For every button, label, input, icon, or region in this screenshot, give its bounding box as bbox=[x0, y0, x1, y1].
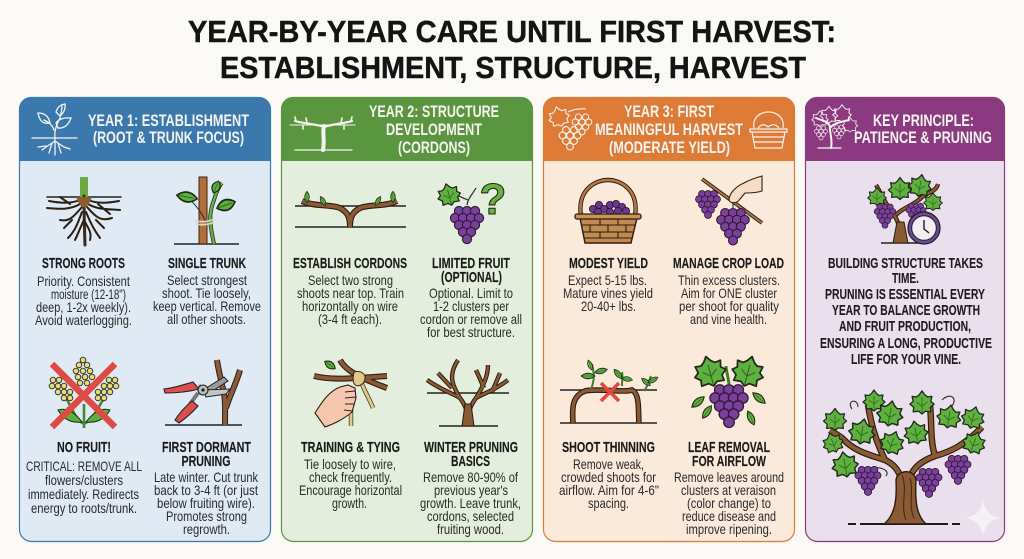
item: modest yield: Expect 5-15 lbs. bbox=[568, 273, 647, 288]
heading: year 2: YEAR 2: STRUCTURE bbox=[369, 102, 499, 121]
heading: year 1: YEAR 1: ESTABLISHMENT bbox=[88, 111, 249, 130]
item: modest yield: Mature vines yield bbox=[563, 286, 653, 301]
item: shoot thinning: Remove weak, bbox=[573, 457, 644, 472]
item: single trunk bbox=[153, 177, 261, 327]
item: establish cordons: horizontally on wire bbox=[302, 299, 398, 314]
icon: pruned vine bbox=[427, 360, 509, 426]
title bbox=[188, 14, 836, 85]
item: first dormant pruning: PRUNING bbox=[182, 453, 230, 470]
item: limited fruit: 1-2 clusters per bbox=[433, 299, 509, 314]
item: no fruit: immediately. Redirects bbox=[28, 487, 139, 502]
item: manage crop load bbox=[673, 176, 784, 327]
item: limited fruit: LIMITED FRUIT bbox=[432, 255, 510, 272]
icon: mature vine tree bbox=[820, 390, 989, 524]
icon: hand tying cordon bbox=[314, 359, 387, 427]
item: manage crop load: Aim for ONE cluster bbox=[681, 286, 777, 301]
item: establish cordons: Select two strong bbox=[308, 273, 393, 288]
icon: basket of grapes bbox=[575, 180, 641, 243]
item: winter pruning basics: BASICS bbox=[451, 453, 490, 470]
icon: sparkle watermark bbox=[965, 501, 1001, 535]
item: leaf removal: reduce disease and bbox=[682, 509, 776, 524]
item: no fruit bbox=[26, 357, 142, 516]
item: single trunk: SINGLE TRUNK bbox=[168, 255, 246, 272]
item: first dormant pruning: Late winter. Cut trunk bbox=[154, 470, 258, 485]
item: manage crop load: and vine health. bbox=[690, 312, 767, 327]
icon: white basket bbox=[750, 112, 787, 148]
item: leaf removal: LEAF REMOVAL bbox=[688, 439, 770, 456]
icon: white vine bbox=[290, 117, 355, 150]
item: modest yield: MODEST YIELD bbox=[569, 255, 648, 272]
item: establish cordons bbox=[293, 191, 407, 327]
item: strong roots: STRONG ROOTS bbox=[42, 255, 125, 272]
heading: year 2: DEVELOPMENT bbox=[386, 120, 482, 139]
panel: year 3 first harvest bbox=[543, 97, 795, 542]
item: limited fruit: for best structure. bbox=[427, 325, 515, 340]
item: strong roots bbox=[35, 177, 132, 328]
item: leaf removal: improve ripening. bbox=[686, 522, 772, 537]
panel: year 1 establishment bbox=[19, 97, 271, 542]
item: training and tying: Tie loosely to wire, bbox=[304, 457, 396, 472]
item: first dormant pruning bbox=[154, 360, 258, 537]
item: first dormant pruning: Promotes strong bbox=[166, 509, 247, 524]
item: leaf removal bbox=[674, 352, 784, 537]
heading: year 3: YEAR 3: FIRST bbox=[624, 102, 714, 121]
heading: year 3 bbox=[595, 102, 743, 157]
item: first dormant pruning: below fruiting wire). bbox=[157, 496, 255, 511]
item: winter pruning basics: previous year's bbox=[434, 483, 508, 498]
heading: year 1 bbox=[88, 111, 249, 147]
item: no fruit: flowers/clusters bbox=[45, 473, 123, 488]
item: modest yield: 20-40+ lbs. bbox=[581, 299, 636, 314]
item: limited fruit: cordon or remove all bbox=[420, 312, 522, 327]
heading: year 2 bbox=[369, 102, 499, 157]
key principle text: AND FRUIT PRODUCTION, bbox=[839, 318, 971, 335]
item: shoot thinning bbox=[559, 359, 659, 511]
item: winter pruning basics: cordons, selected bbox=[427, 509, 514, 524]
heading: year 3: MEANINGFUL HARVEST bbox=[595, 120, 743, 139]
item: first dormant pruning: FIRST DORMANT bbox=[162, 439, 251, 456]
item: training and tying: check frequently. bbox=[309, 470, 392, 485]
item: shoot thinning: crowded shoots for bbox=[561, 470, 656, 485]
item: establish cordons: ESTABLISH CORDONS bbox=[293, 255, 407, 272]
item: winter pruning basics bbox=[420, 360, 521, 537]
icon: grape with question mark: ? bbox=[480, 175, 506, 224]
icon: vine with clock bbox=[868, 173, 942, 244]
item: manage crop load: per shoot for quality bbox=[679, 299, 779, 314]
heading: year 3: (MODERATE YIELD) bbox=[609, 138, 730, 157]
item: leaf removal: clusters at veraison bbox=[681, 483, 776, 498]
icon: arched vine with red cross bbox=[560, 359, 659, 423]
icon: staked shoot bbox=[174, 177, 239, 244]
heading: year 2: (CORDONS) bbox=[398, 138, 470, 157]
item: limited fruit bbox=[420, 175, 522, 340]
icon: grape with leaves bbox=[690, 352, 768, 427]
panel: year 2 structure development bbox=[281, 97, 533, 542]
item: leaf removal: (color change) to bbox=[687, 496, 771, 511]
item: limited fruit: (OPTIONAL) bbox=[441, 269, 502, 286]
item: strong roots: moisture (12-18") bbox=[51, 287, 126, 302]
item: establish cordons: shoots near top. Train bbox=[297, 286, 404, 301]
key principle text: LIFE FOR YOUR VINE. bbox=[851, 351, 961, 368]
icon: roots bbox=[47, 177, 121, 245]
icon: seedling bbox=[32, 104, 77, 155]
item: leaf removal: FOR AIRFLOW bbox=[692, 453, 767, 470]
icon: white grapes bbox=[546, 104, 592, 150]
heading: key principle bbox=[854, 111, 992, 147]
item: no fruit: NO FRUIT! bbox=[57, 439, 111, 456]
item: strong roots: Priority. Consistent bbox=[37, 274, 130, 289]
item: training and tying: Encourage horizontal bbox=[299, 483, 402, 498]
item: no fruit: CRITICAL: REMOVE ALL bbox=[26, 459, 142, 474]
item: training and tying: TRAINING & TYING bbox=[301, 439, 400, 456]
key principle text bbox=[820, 255, 992, 368]
item: manage crop load: MANAGE CROP LOAD bbox=[673, 255, 784, 272]
panel: key principle bbox=[805, 97, 1005, 542]
item: modest yield bbox=[563, 180, 653, 314]
icon: white vine tree bbox=[812, 105, 858, 148]
icon: grape with question mark bbox=[435, 175, 506, 244]
key principle text: TIME. bbox=[892, 270, 919, 287]
heading: key principle: KEY PRINCIPLE: bbox=[873, 111, 974, 130]
title: YEAR-BY-YEAR CARE UNTIL FIRST HARVEST: bbox=[188, 14, 836, 49]
item: manage crop load: Thin excess clusters. bbox=[678, 273, 780, 288]
item: limited fruit: Optional. Limit to bbox=[429, 286, 513, 301]
item: single trunk: all other shoots. bbox=[167, 312, 246, 327]
item: winter pruning basics: growth. Leave trunk, bbox=[420, 496, 521, 511]
heading: year 1: (ROOT & TRUNK FOCUS) bbox=[93, 128, 244, 147]
item: strong roots: Avoid waterlogging. bbox=[35, 313, 132, 328]
icon: cordons on wire bbox=[295, 191, 406, 227]
item: shoot thinning: airflow. Aim for 4-6" bbox=[559, 483, 659, 498]
item: single trunk: shoot. Tie loosely, bbox=[162, 286, 251, 301]
item: winter pruning basics: fruiting wood. bbox=[437, 522, 504, 537]
item: first dormant pruning: regrowth. bbox=[183, 522, 230, 537]
item: no fruit: energy to roots/trunk. bbox=[31, 501, 137, 516]
item: winter pruning basics: Remove 80-90% of bbox=[423, 470, 518, 485]
item: training and tying: growth. bbox=[332, 496, 367, 511]
item: leaf removal: Remove leaves around bbox=[674, 470, 784, 485]
icon: crossed flower clusters bbox=[49, 357, 119, 428]
title: ESTABLISHMENT, STRUCTURE, HARVEST bbox=[220, 50, 806, 85]
item: first dormant pruning: back to 3-4 ft (or just bbox=[154, 483, 258, 498]
item: establish cordons: (3-4 ft each). bbox=[318, 312, 382, 327]
icon: pruners and stem bbox=[164, 360, 242, 425]
item: training and tying bbox=[299, 359, 402, 511]
item: single trunk: keep vertical. Remove bbox=[153, 299, 261, 314]
item: strong roots: deep, 1-2x weekly). bbox=[36, 300, 131, 315]
icon: hand thinning clusters bbox=[696, 176, 762, 245]
item: shoot thinning: SHOOT THINNING bbox=[562, 439, 655, 456]
item: winter pruning basics: WINTER PRUNING bbox=[424, 439, 518, 456]
item: shoot thinning: spacing. bbox=[588, 496, 629, 511]
item: single trunk: Select strongest bbox=[167, 273, 247, 288]
